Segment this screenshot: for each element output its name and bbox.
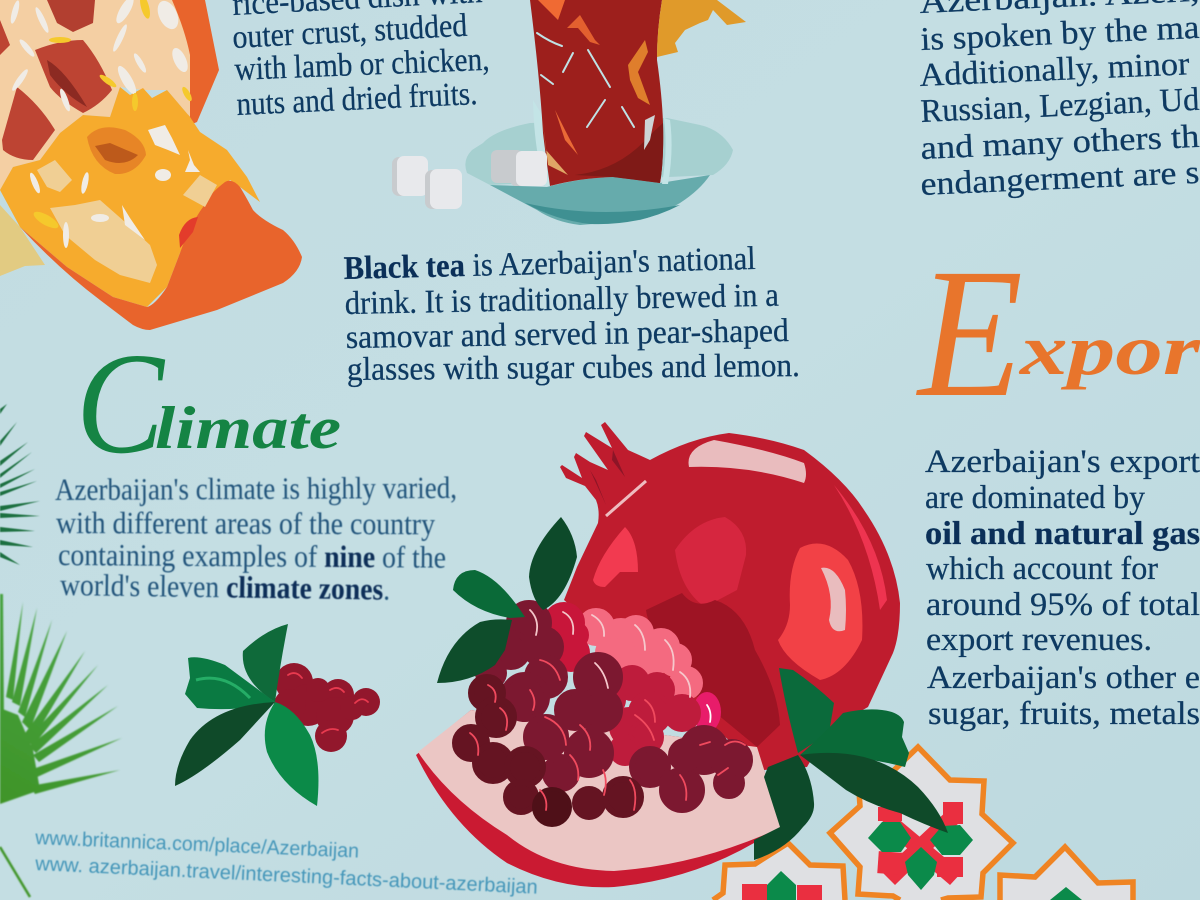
illustration: green palm frond [0, 594, 122, 897]
illustration: rice pilaf dish [0, 0, 302, 330]
text: climate description: Azerbaijan's climate is highly varied, [55, 470, 457, 507]
illustration: small leaf and berry sprig [175, 624, 380, 806]
text: languages, top right: Russian, Lezgian, Ud [920, 82, 1200, 130]
seeds [455, 603, 750, 825]
heading: Climate: C [76, 324, 166, 484]
text: languages, top right [919, 0, 1200, 203]
text: black tea description: Black tea is Azerbaijan's national [343, 241, 756, 287]
illustration: decorative star tiles [713, 747, 1133, 900]
text: export description: sugar, fruits, metals [928, 696, 1200, 732]
illustration: pomegranate [416, 422, 948, 887]
heading: Climate [76, 324, 341, 484]
text: climate description: with different areas of the country [56, 505, 436, 541]
text: export description [925, 444, 1200, 732]
text: languages, top right: and many others th [920, 119, 1200, 167]
text: export description: Azerbaijan's export [925, 444, 1200, 480]
heading: Export [915, 231, 1200, 436]
text: source links: www. azerbaijan.travel/interesting-facts-about-azerbaijan [34, 853, 538, 899]
text: climate description: containing examples of nine of the [58, 537, 446, 575]
heading: Climate: limate [155, 395, 341, 461]
highlights on skin [689, 440, 806, 483]
fruit slice [416, 710, 782, 887]
text: black tea description: samovar and served in pear-shaped [346, 313, 790, 356]
text: black tea description: drink. It is traditionally brewed in a [344, 278, 779, 322]
text: languages, top right: endangerment are s [920, 155, 1200, 203]
text: export description: oil and natural gas [925, 516, 1200, 552]
heading: Export: xpor [1019, 310, 1200, 390]
seed highlights [470, 610, 745, 810]
text: export description: Azerbaijan's other e [927, 660, 1200, 696]
heading: Export: E [915, 231, 1023, 436]
text: export description: export revenues. [926, 622, 1152, 658]
text: rice dish description: outer crust, studded [232, 8, 469, 56]
pomegranate skin [560, 422, 900, 770]
illustration: dark palm frond [0, 404, 40, 565]
text: rice dish description: with lamb or chicken, [234, 42, 490, 88]
text: languages, top right: Additionally, minor [919, 46, 1190, 94]
text: climate description: world's eleven climate zones. [60, 567, 390, 607]
text: export description: are dominated by [925, 480, 1145, 516]
text: rice dish description: nuts and dried fruits. [236, 76, 478, 123]
illustration: black tea glass on saucer [392, 0, 746, 225]
text: languages, top right: is spoken by the ma [920, 10, 1200, 58]
text: source links [34, 827, 538, 899]
text: rice dish description [232, 0, 490, 123]
text: source links: www.britannica.com/place/Azerbaijan [34, 827, 359, 863]
text: export description: which account for [926, 551, 1158, 587]
text: black tea description: glasses with sugar cubes and lemon. [347, 348, 800, 388]
text: export description: around 95% of total [926, 587, 1200, 623]
text: black tea description [343, 241, 800, 388]
pomegranate leaves [529, 517, 577, 610]
text: climate description [55, 470, 457, 607]
